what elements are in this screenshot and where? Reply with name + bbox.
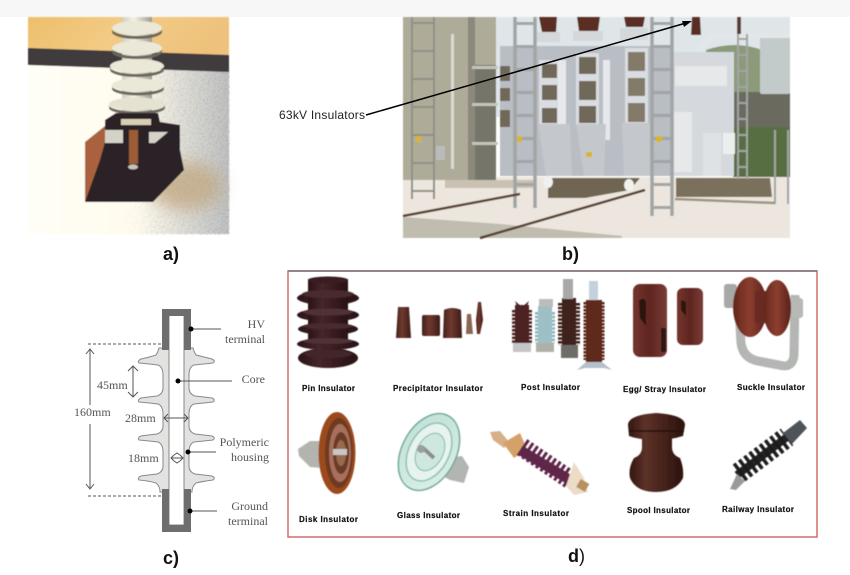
frame <box>288 271 817 537</box>
disk insulator <box>298 412 356 494</box>
leader lines and dots <box>176 326 232 514</box>
tan strip at wall base <box>445 180 535 188</box>
floor <box>28 65 229 234</box>
top bar <box>0 0 850 17</box>
unit 4 <box>577 281 612 370</box>
panel c: polymer insulator diagram <box>74 309 269 532</box>
panel c: polymer insulator diagram: 18mm <box>128 451 159 465</box>
panel c caption: c) <box>163 548 179 568</box>
radiator housings lower <box>538 123 650 176</box>
ground terminal <box>162 489 191 532</box>
egg / stray insulator <box>633 284 703 357</box>
concrete wall <box>403 17 496 180</box>
green bush <box>733 127 790 177</box>
transformer body <box>500 46 672 176</box>
sky background <box>403 17 790 117</box>
panel c: polymer insulator diagram: housing <box>231 450 269 464</box>
suckle insulator <box>724 277 803 366</box>
label: Glass Insulator: Glass Insulator <box>397 511 460 520</box>
panel d: insulator types frame <box>288 271 817 537</box>
unit 1 <box>513 301 531 352</box>
dark block <box>85 113 184 202</box>
bushing caps <box>535 28 648 42</box>
panel c: polymer insulator diagram: Ground <box>231 499 268 513</box>
dark wall base band <box>28 48 229 72</box>
label: Suckle Insulator: Suckle Insulator <box>737 383 805 392</box>
radiator frames <box>539 48 648 140</box>
right side tank <box>760 37 790 94</box>
ground gravel <box>403 177 790 238</box>
unit 2 <box>536 299 554 352</box>
brown side of block <box>85 126 105 202</box>
rails <box>403 190 775 238</box>
spool insulator <box>628 413 685 492</box>
panel c: polymer insulator diagram: 160mm <box>74 405 111 419</box>
panel c: polymer insulator diagram: terminal <box>225 332 266 346</box>
strain insulator <box>490 431 589 495</box>
dimension lines <box>86 344 188 496</box>
bushings <box>539 17 741 37</box>
transformer right tank <box>672 52 735 176</box>
label: Disk Insulator: Disk Insulator <box>299 515 358 524</box>
railway insulator <box>730 420 807 490</box>
unit 3 <box>561 279 578 358</box>
arrow: 63kV insulators pointer <box>366 21 692 115</box>
polymeric housing with sheds <box>138 348 214 492</box>
floor shadow <box>150 162 222 210</box>
panel b caption: b) <box>562 244 579 264</box>
pipe right top <box>700 36 790 50</box>
label: Pin Insulator: Pin Insulator <box>302 384 355 393</box>
label: Strain Insulator: Strain Insulator <box>503 509 569 518</box>
label: Egg/ Stray Insulator: Egg/ Stray Insulator <box>623 385 706 394</box>
panel c: polymer insulator diagram: 28mm <box>125 411 156 425</box>
label: Post Insulator: Post Insulator <box>521 383 580 392</box>
panel b: substation transformer photo <box>403 17 790 238</box>
dark ground below transformer <box>548 178 640 198</box>
radiators <box>500 52 645 127</box>
diagram labels: HV <box>248 317 265 331</box>
label: Spool Insulator: Spool Insulator <box>627 506 690 515</box>
hill <box>706 45 762 100</box>
insulator column <box>109 17 165 117</box>
panel c: polymer insulator diagram: terminal <box>228 514 269 528</box>
white pots <box>543 176 634 191</box>
block fittings <box>105 119 168 170</box>
wall background <box>28 17 229 57</box>
pin insulator <box>297 276 359 368</box>
label: Railway Insulator: Railway Insulator <box>722 505 794 514</box>
concrete slab <box>403 217 622 238</box>
panel c: polymer insulator diagram: 45mm <box>97 378 128 392</box>
steel frame <box>436 17 498 180</box>
glass insulator <box>386 403 472 501</box>
panel d caption: d) <box>568 546 585 566</box>
core <box>169 315 184 525</box>
HV terminal <box>162 309 191 350</box>
panel a: photo of insulator on block <box>28 17 230 235</box>
post insulators <box>513 279 612 370</box>
panel c: polymer insulator diagram: Core <box>242 372 265 386</box>
label: Precipitator Insulator: Precipitator Insulator <box>393 384 483 393</box>
floor speckle <box>135 70 230 236</box>
yellow tags <box>416 136 662 157</box>
label: 63kV Insulators: 63kV Insulators <box>279 108 365 122</box>
lattice towers <box>412 17 788 216</box>
equipment behind <box>730 92 790 132</box>
precipitator insulator <box>396 302 483 338</box>
panel c: polymer insulator diagram: Polymeric <box>220 435 269 449</box>
panel a caption: a) <box>163 244 179 264</box>
